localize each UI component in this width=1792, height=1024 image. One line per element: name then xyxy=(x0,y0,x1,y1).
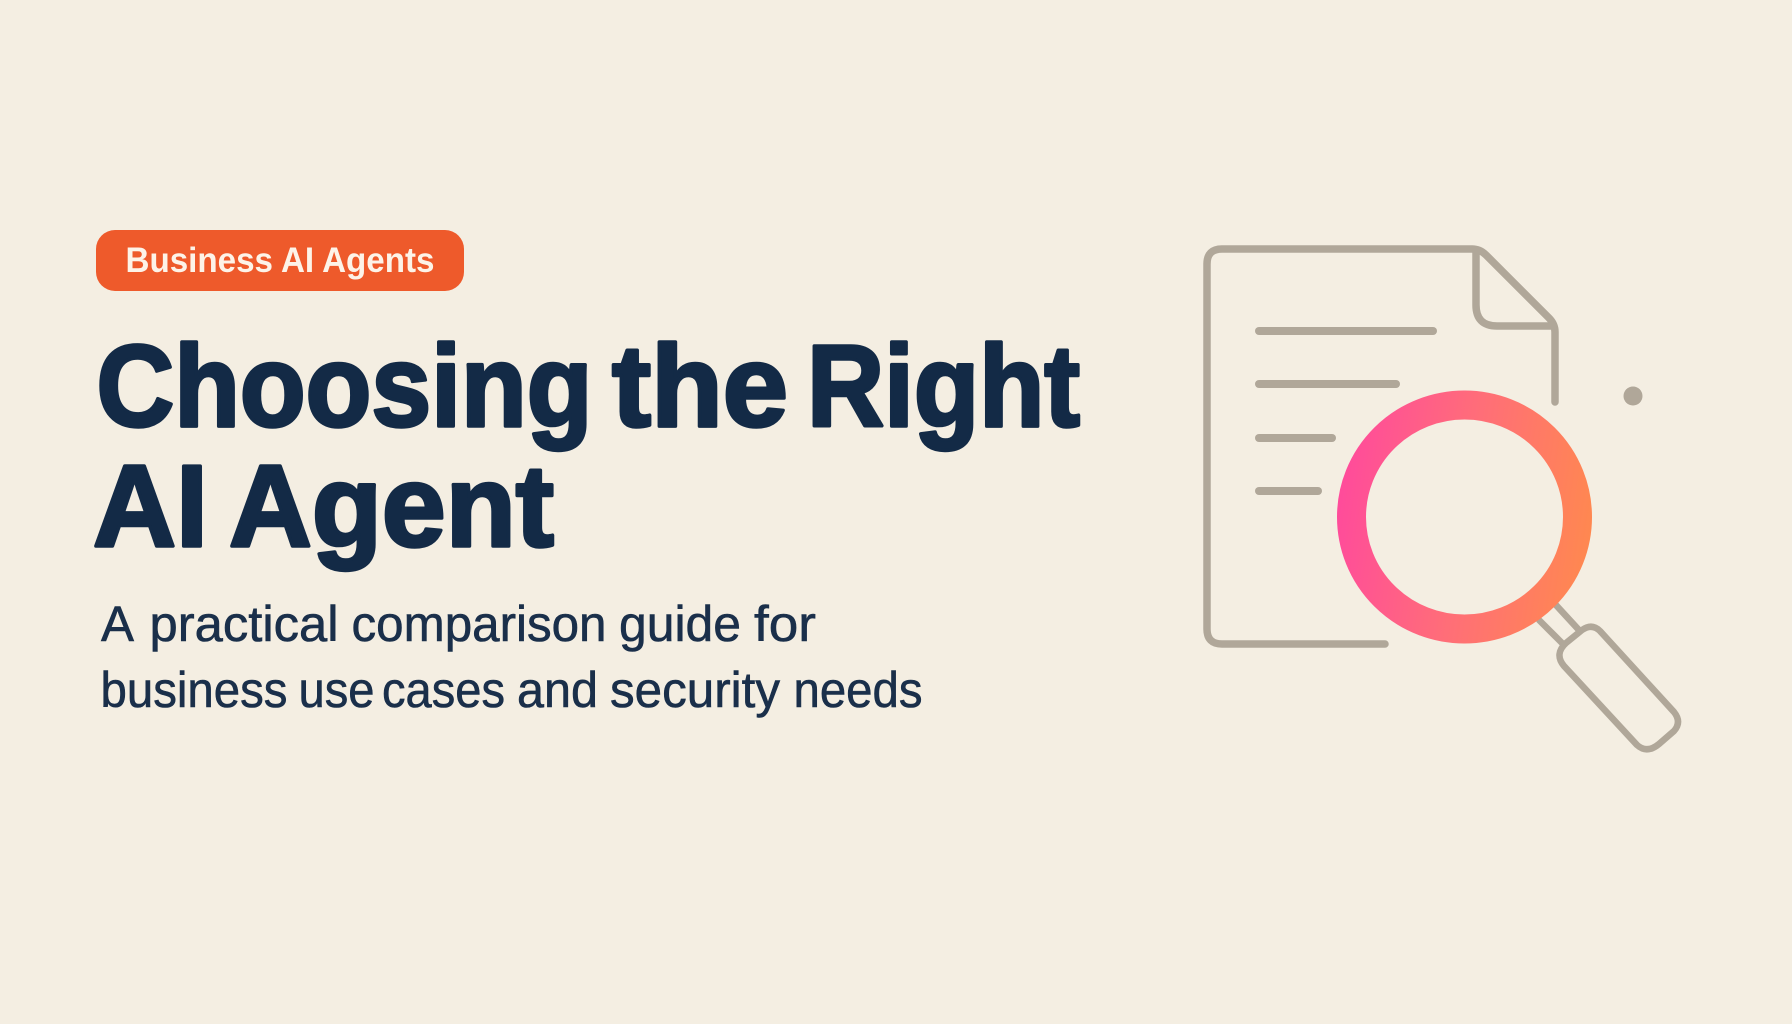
subtitle: guide xyxy=(619,596,741,652)
title: Right xyxy=(807,321,1080,451)
icon: magnifier ring xyxy=(1352,405,1578,629)
icon: magnifier handle xyxy=(1539,604,1678,749)
subtitle: security xyxy=(610,662,780,718)
subtitle: practical xyxy=(150,596,338,652)
badge: Business AI Agents xyxy=(96,230,464,291)
subtitle: use xyxy=(298,662,374,718)
subtitle: cases xyxy=(382,662,505,718)
subtitle: and xyxy=(517,662,598,718)
subtitle: needs xyxy=(794,662,922,718)
illustration: document with magnifying glass xyxy=(1207,249,1678,749)
title: Choosing xyxy=(96,321,592,451)
subtitle: business xyxy=(100,662,288,718)
subtitle: for xyxy=(754,596,816,652)
icon: document text lines xyxy=(1259,331,1433,491)
icon: small dot xyxy=(1624,386,1642,406)
subtitle xyxy=(100,596,922,718)
title: AI xyxy=(93,441,208,571)
subtitle: A xyxy=(101,596,135,652)
title: Agent xyxy=(229,441,554,571)
subtitle: comparison xyxy=(352,596,606,652)
title: the xyxy=(612,321,788,451)
icon: document outline xyxy=(1207,249,1555,644)
badge: Business AI Agents: Business AI Agents xyxy=(126,241,434,280)
title xyxy=(93,321,1080,571)
